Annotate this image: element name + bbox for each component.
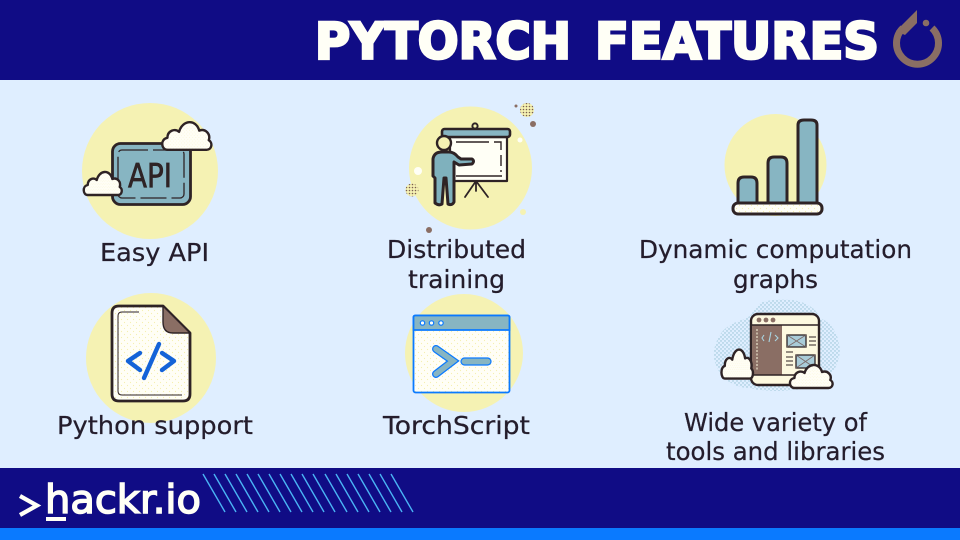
decorative dots around the icon xyxy=(406,103,536,233)
label: Dynamic computation xyxy=(639,235,912,264)
icon: left cloud xyxy=(721,350,753,379)
panel: Wide variety of tools and libraries xyxy=(666,299,885,466)
label: Python support xyxy=(57,411,253,440)
panel: Distributed training xyxy=(387,103,536,294)
icon: presentation board xyxy=(442,123,510,197)
logo: hackr.io: hackr.io xyxy=(45,478,201,523)
label: TorchScript xyxy=(382,411,530,440)
icon: upper cloud xyxy=(162,122,211,150)
icon: PyTorch flame logo xyxy=(896,10,938,64)
icon: lower cloud xyxy=(84,172,122,195)
icon: bar chart xyxy=(733,120,822,214)
icon: API screen: API xyxy=(128,156,172,195)
panel: Wide variety of tools and libraries: tools and libraries xyxy=(666,437,885,466)
icon: browser window xyxy=(751,314,819,385)
panel: Distributed training: training xyxy=(408,265,505,294)
panel: TorchScript xyxy=(382,294,530,440)
label: Distributed xyxy=(387,235,526,264)
header band xyxy=(0,0,960,80)
icon: terminal window xyxy=(414,316,510,392)
label: Wide variety of xyxy=(684,408,868,437)
panel: Dynamic computation graphs xyxy=(639,114,912,294)
title: FEATURES xyxy=(595,12,879,70)
hatch lines xyxy=(203,474,413,512)
title: PYTORCH xyxy=(315,12,571,70)
icon: API screen xyxy=(112,144,190,204)
icon: right cloud xyxy=(790,365,833,388)
footer band xyxy=(0,468,960,540)
dotted blob backdrop xyxy=(714,299,840,391)
panel: Dynamic computation graphs: graphs xyxy=(733,265,818,294)
icon: code document xyxy=(112,306,190,401)
icon: code brackets xyxy=(128,344,174,378)
panel: Easy API xyxy=(82,103,218,267)
panel: Python support xyxy=(57,293,253,440)
label: Easy API xyxy=(100,238,209,267)
icon: presenter xyxy=(433,136,474,205)
